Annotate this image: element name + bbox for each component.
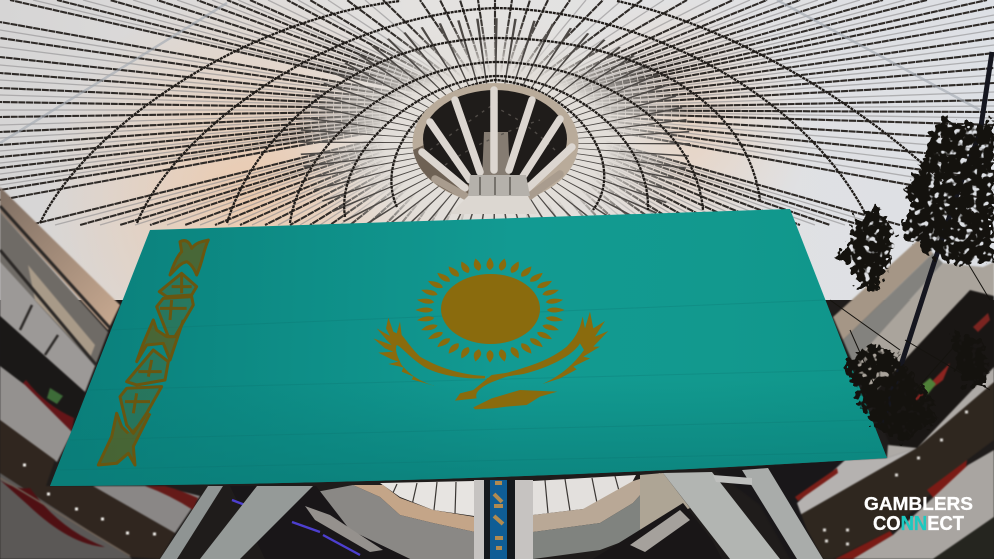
purple neon lines (232, 467, 832, 555)
pale cables (0, 0, 980, 143)
upper leaf mass (900, 120, 994, 265)
leaf masses with irregular edges (836, 120, 994, 442)
column with blue banner (474, 480, 533, 559)
flag cloth (50, 209, 887, 486)
tree foliage on the right (830, 52, 994, 442)
balcony glass (316, 485, 475, 559)
bottom centre: skylight, balconies and columns (230, 467, 832, 559)
right balcony structure (714, 240, 994, 559)
right leaf cluster (950, 332, 988, 385)
roof rings (40, 1, 975, 223)
logo line 2: CONNECT (873, 513, 964, 535)
sun rays (415, 258, 565, 362)
dome roof (0, 0, 994, 340)
flag of Kazakhstan (50, 209, 887, 486)
dark roof spokes (0, 0, 994, 225)
light wash around the hub (295, 18, 695, 268)
national ornament band (98, 240, 208, 465)
lower leaf cluster (845, 342, 936, 442)
dark trunk post (880, 52, 992, 430)
left balcony structure (0, 187, 200, 559)
logo: Gamblers Connect (864, 493, 973, 535)
bare branches (830, 250, 990, 430)
fine radial lines near the hub (398, 81, 592, 205)
steppe eagle (373, 312, 608, 409)
skylight (380, 481, 474, 516)
logo line 1: GAMBLERS (864, 493, 973, 514)
sun disc (441, 274, 540, 344)
peach canopy right (533, 473, 660, 532)
dome hub: central oculus with white struts (412, 83, 578, 214)
light mid-panel lines (0, 0, 994, 225)
white diagonal columns, right (663, 468, 823, 559)
dark lower floors (230, 486, 410, 559)
middle leaf cluster (836, 208, 893, 292)
lower hall background (0, 300, 994, 559)
white diagonal columns, left (160, 486, 313, 559)
peach canopy left (353, 485, 475, 532)
